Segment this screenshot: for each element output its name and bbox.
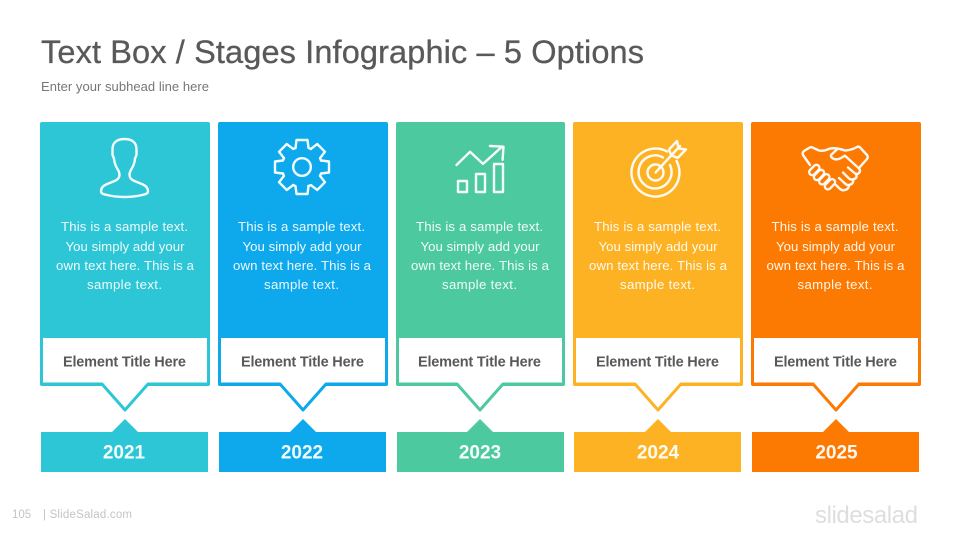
body text: This is a sample text. [61, 219, 188, 234]
body text: This is a sample text. [238, 219, 365, 234]
year tab: 2023 [459, 442, 501, 464]
body text [233, 219, 372, 292]
icon: target with arrow [631, 141, 686, 197]
card background [573, 122, 743, 386]
panel: stage 2023 [396, 122, 565, 472]
panel: stage 2024 [573, 122, 743, 472]
body text: This is a sample text. [416, 219, 543, 234]
year tab [397, 419, 564, 472]
body text: You simply add your [598, 239, 718, 254]
body text: You simply add your [776, 239, 896, 254]
title callout [398, 336, 564, 410]
title: Text Box / Stages Infographic – 5 Options [41, 34, 644, 70]
body text [589, 219, 728, 292]
body text: You simply add your [66, 239, 185, 254]
year tab: 2022 [281, 442, 323, 464]
icon: growth chart [456, 146, 504, 192]
icon: gear [275, 140, 329, 194]
body text: You simply add your [242, 239, 362, 254]
year tab [752, 419, 919, 472]
body text: own text here. This is a [589, 258, 728, 273]
body text: sample text. [442, 277, 517, 292]
body text: own text here. This is a [411, 258, 550, 273]
footer: page number and site: | SlideSalad.com [43, 509, 132, 521]
icon: person [101, 139, 148, 197]
year tab [574, 419, 741, 472]
card background [751, 122, 921, 386]
body text: sample text. [87, 277, 162, 292]
title callout: Element Title Here [418, 354, 541, 370]
body text: sample text. [798, 277, 872, 292]
body text [56, 219, 195, 292]
body text [411, 219, 550, 292]
body text: own text here. This is a [233, 258, 372, 273]
icon: handshake [803, 147, 868, 191]
title callout [574, 336, 742, 410]
year tab [41, 419, 208, 472]
year tab: 2024 [637, 442, 680, 464]
panel: stage 2022 [218, 122, 388, 472]
body text: sample text. [264, 277, 339, 292]
body text: sample text. [620, 277, 695, 292]
year tab [219, 419, 386, 472]
footer: page number and site: 105 [12, 509, 31, 521]
footer: logo wordmark: slidesalad [815, 502, 918, 529]
panel: stage 2021 [40, 122, 210, 472]
title callout [220, 336, 386, 410]
body text: This is a sample text. [594, 219, 721, 234]
year tab: 2025 [815, 442, 858, 464]
body text: own text here. This is a [56, 258, 195, 273]
card background [40, 122, 210, 386]
card background [218, 122, 388, 386]
title callout: Element Title Here [774, 354, 897, 370]
title callout [752, 336, 920, 410]
title callout [42, 336, 208, 410]
body text: This is a sample text. [772, 219, 898, 234]
title callout: Element Title Here [596, 354, 719, 370]
title callout: Element Title Here [63, 354, 186, 370]
panel: stage 2025 [751, 122, 921, 472]
card background [396, 122, 565, 386]
subhead: Enter your subhead line here [41, 79, 209, 94]
title callout: Element Title Here [241, 354, 364, 370]
body text [766, 219, 905, 292]
body text: own text here. This is a [766, 258, 905, 273]
year tab: 2021 [103, 442, 146, 464]
body text: You simply add your [420, 239, 540, 254]
